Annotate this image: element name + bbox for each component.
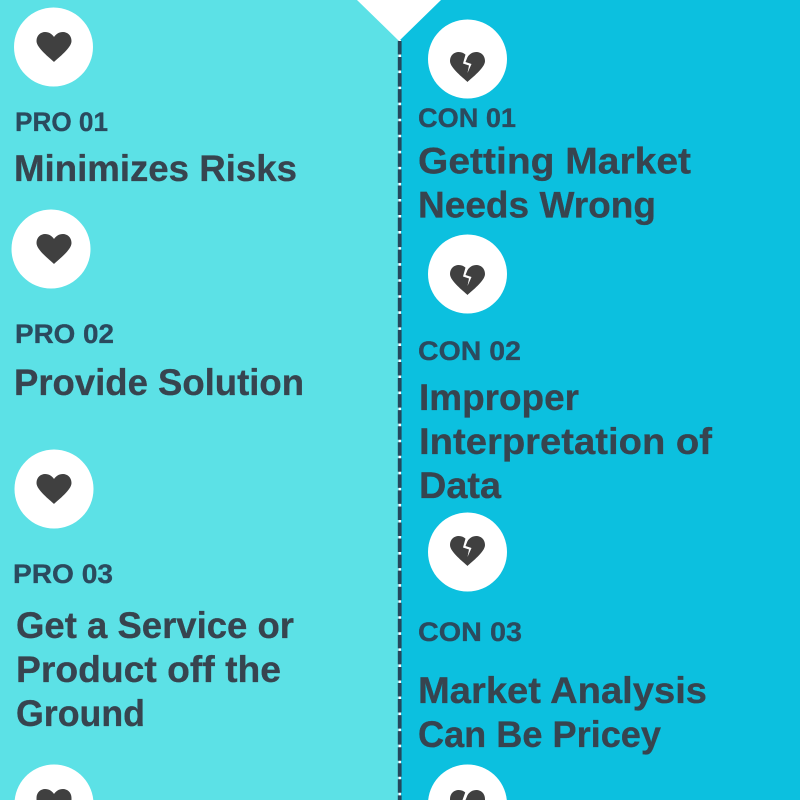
icon: heart 2 — [12, 210, 90, 288]
icon: broken heart 3 — [428, 512, 507, 592]
label: pro 03: PRO 03 — [13, 559, 113, 589]
pro 02 item — [12, 210, 304, 403]
icon: heart 1 — [14, 8, 93, 86]
dashed center divider — [398, 40, 401, 800]
heading: minimizes risks: Minimizes Risks — [14, 148, 297, 189]
icon: broken heart 2 — [428, 234, 507, 314]
label: con 02: CON 02 — [418, 336, 521, 366]
heading: market analysis can be pricey: Market Analysis — [418, 670, 707, 711]
con 02 item — [418, 234, 713, 506]
label: pro 01: PRO 01 — [15, 107, 108, 137]
heading: provide solution: Provide Solution — [14, 362, 304, 403]
heading: improper interpretation of data — [419, 377, 713, 506]
pro 03 item — [13, 450, 294, 734]
label: con 01: CON 01 — [418, 103, 516, 133]
white triangle notch — [357, 0, 441, 41]
panel: pros background — [0, 0, 398, 800]
heading: getting market needs wrong: Getting Market — [418, 140, 691, 182]
pro 01 item — [14, 8, 297, 189]
heading: improper interpretation of data: Data — [419, 465, 501, 506]
heading: market analysis can be pricey: Can Be Pricey — [418, 714, 661, 755]
con 03 item — [418, 512, 707, 755]
con 01 item — [418, 20, 691, 226]
heading: get a service or product off the ground: Get a Service or — [16, 605, 294, 646]
icon: heart 3 — [14, 450, 94, 528]
heading: improper interpretation of data: Improper — [419, 377, 579, 418]
heading: get a service or product off the ground: Product off the — [16, 649, 281, 690]
icon: heart 4 (cropped) — [15, 764, 93, 800]
heading: market analysis can be pricey — [418, 670, 707, 755]
icon: broken heart 1 — [428, 20, 507, 98]
heading: get a service or product off the ground — [16, 605, 294, 734]
heading: get a service or product off the ground: Ground — [16, 693, 145, 734]
label: pro 02: PRO 02 — [15, 319, 114, 349]
heading: getting market needs wrong: Needs Wrong — [418, 184, 656, 226]
heading: getting market needs wrong — [418, 140, 691, 226]
icon: broken heart 4 (cropped) — [428, 764, 507, 800]
panel: cons background — [398, 0, 800, 800]
heading: improper interpretation of data: Interpretation of — [419, 421, 713, 462]
label: con 03: CON 03 — [418, 617, 522, 647]
